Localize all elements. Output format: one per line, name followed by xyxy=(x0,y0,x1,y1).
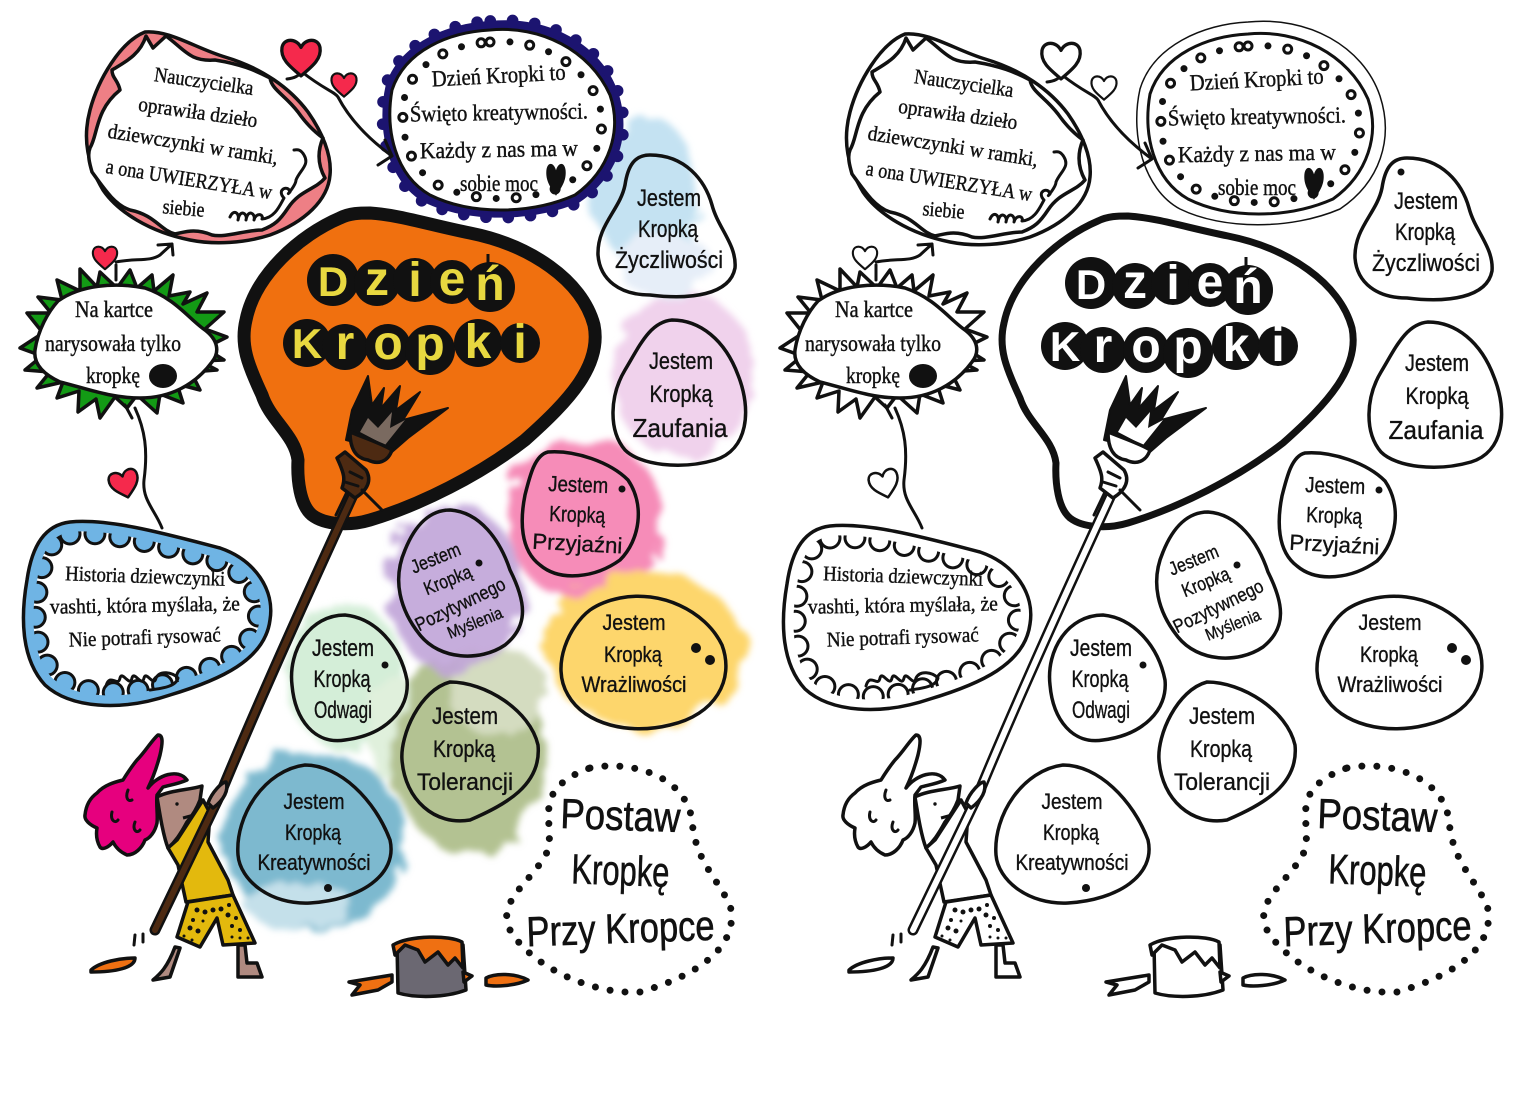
outline dot bubble: Tolerancji xyxy=(1159,682,1295,821)
dot bubble: Wrażliwości: Kropką xyxy=(604,642,663,667)
outline bubble: Historia: vashti, która myślała, że xyxy=(808,591,998,619)
bubble: Dzień Kropki to: Święto kreatywności. xyxy=(410,97,588,127)
dotted bubble: Postaw Kropkę xyxy=(507,766,732,992)
dot bubble: Życzliwości: Kropką xyxy=(638,216,699,243)
outline dotted bubble: Postaw Kropkę: Przy Kropce xyxy=(1283,902,1472,955)
dot bubble: Tolerancji: Tolerancji xyxy=(417,769,513,796)
bubble: Na kartce xyxy=(20,269,227,418)
bubble: Dzień Kropki to: sobie moc xyxy=(460,171,538,196)
outline title blob: z xyxy=(1123,256,1147,309)
bubble: Historia xyxy=(23,521,271,705)
outline dot bubble: Odwagi: Odwagi xyxy=(1072,697,1130,724)
outline bubble: Dzień Kropki to: sobie moc xyxy=(1218,175,1296,200)
outline heart with arrow xyxy=(853,244,933,280)
dot bubble: Pozytywnego Myślenia xyxy=(399,510,522,656)
outline title blob xyxy=(1002,216,1353,527)
dot bubble: Życzliwości xyxy=(598,155,735,297)
outline heart connector xyxy=(867,405,922,528)
outline dot bubble: Kreatywności xyxy=(996,765,1149,903)
heart connector xyxy=(107,405,162,528)
title blob xyxy=(244,213,595,524)
dot bubble: Kreatywności: Jestem xyxy=(284,789,344,814)
dot bubble: Przyjaźni: Jestem xyxy=(548,471,609,498)
bubble: Dzień Kropki to: Każdy z nas ma w xyxy=(420,136,578,163)
outline bubble: Nauczycielka: Nauczycielka xyxy=(913,64,1016,102)
outline dot bubble: Życzliwości: Jestem xyxy=(1394,188,1458,215)
outline bubble: Na kartce: narysowała tylko xyxy=(805,331,941,356)
outline dotted bubble: Postaw Kropkę: Postaw xyxy=(1317,790,1439,841)
title blob: K xyxy=(292,320,322,367)
bubble: Na kartce: Na kartce xyxy=(75,297,153,322)
girl with brush xyxy=(85,376,448,980)
outline dot bubble: Tolerancji: Tolerancji xyxy=(1174,769,1270,796)
dot bubble: Odwagi: Kropką xyxy=(314,666,371,693)
outline title blob: k xyxy=(1223,319,1250,372)
outline hearts with arrow xyxy=(1042,43,1152,168)
outline dot bubble: Życzliwości xyxy=(1355,158,1492,300)
dot bubble: Odwagi: Jestem xyxy=(312,635,374,662)
outline dot bubble: Wrażliwości xyxy=(1317,596,1482,729)
outline dot bubble: Odwagi: Kropką xyxy=(1072,666,1129,693)
outline dot bubble: Wrażliwości: Kropką xyxy=(1360,642,1419,667)
outline title blob: ń xyxy=(1233,261,1263,314)
outline bubble: Nauczycielka: dziewczynki w ramki, xyxy=(866,121,1040,171)
outline girl with brush xyxy=(843,376,1206,980)
outline title blob: i xyxy=(1166,257,1180,310)
outline dot bubble: Pozytywnego Myślenia: Kropką xyxy=(1179,564,1233,602)
outline title blob: K xyxy=(1050,323,1080,370)
dotted bubble: Postaw Kropkę: Kropkę xyxy=(571,845,670,896)
outline dot bubble: Wrażliwości: Wrażliwości xyxy=(1338,672,1442,697)
dot bubble: Pozytywnego Myślenia: Jestem xyxy=(408,539,464,578)
outline dotted bubble: Postaw Kropkę: Kropkę xyxy=(1328,845,1427,896)
outline bubble: Nauczycielka: siebie xyxy=(922,196,966,224)
heart with arrow to teacher bubble xyxy=(93,244,173,280)
dot bubble: Tolerancji: Kropką xyxy=(433,736,496,763)
bubble: Historia: vashti, która myślała, że xyxy=(50,591,240,619)
bubble: Historia: Historia dziewczynki xyxy=(65,561,226,591)
dot bubble: Zaufania: Zaufania xyxy=(632,413,728,443)
dotted bubble: Postaw Kropkę: Postaw xyxy=(560,790,682,841)
dot bubble: Pozytywnego Myślenia: Kropką xyxy=(421,562,475,600)
dot bubble: Przyjaźni xyxy=(522,452,638,576)
dot bubble: Zaufania: Jestem xyxy=(649,348,713,375)
title blob: k xyxy=(465,316,492,369)
outline dot bubble: Zaufania: Zaufania xyxy=(1388,415,1484,445)
dot bubble: Pozytywnego Myślenia: Pozytywnego xyxy=(412,574,509,636)
outline title blob: p xyxy=(1173,321,1203,374)
outline bubble: Nauczycielka: a ona UWIERZYŁA w xyxy=(864,156,1035,206)
outline dot bubble: Pozytywnego Myślenia: Jestem xyxy=(1166,541,1222,580)
outline dot bubble: Przyjaźni: Kropką xyxy=(1306,502,1363,529)
outline dot bubble: Przyjaźni: Przyjaźni xyxy=(1289,530,1380,559)
bubble: Nauczycielka: oprawiła dzieło xyxy=(137,92,259,132)
watercolour washes xyxy=(225,115,755,930)
dot bubble: Zaufania: Kropką xyxy=(650,381,713,408)
outline bubble: Nauczycielka xyxy=(846,34,1090,245)
dot bubble: Życzliwości: Życzliwości xyxy=(615,247,723,274)
dot bubble: Zaufania xyxy=(613,320,746,465)
outline dot bubble: Zaufania: Kropką xyxy=(1406,383,1469,410)
dot bubble: Przyjaźni: Przyjaźni xyxy=(532,529,623,558)
panel: divider clip xyxy=(760,0,1520,1120)
bubble: Dzień Kropki to xyxy=(382,20,623,218)
outline dot bubble: Wrażliwości: Jestem xyxy=(1358,610,1422,635)
outline dot bubble: Kreatywności: Kropką xyxy=(1043,820,1100,845)
outline dot bubble: Życzliwości: Kropką xyxy=(1395,219,1456,246)
dot bubble: Odwagi: Odwagi xyxy=(314,697,372,724)
bubble: Nauczycielka: siebie xyxy=(162,194,206,222)
outline paint bucket xyxy=(1106,937,1285,996)
outline bubble: Historia: Historia dziewczynki xyxy=(823,561,984,591)
outline bubble: Dzień Kropki to: Święto kreatywności. xyxy=(1168,101,1346,131)
hearts with arrow xyxy=(282,40,392,165)
title blob: p xyxy=(415,318,445,371)
outline dot bubble: Pozytywnego Myślenia: Pozytywnego xyxy=(1170,576,1267,638)
title blob: i xyxy=(513,316,527,369)
dot bubble: Tolerancji xyxy=(402,682,538,821)
dot bubble: Pozytywnego Myślenia: Myślenia xyxy=(444,603,506,643)
title blob: ń xyxy=(475,258,505,311)
outline dot bubble: Życzliwości: Życzliwości xyxy=(1372,250,1480,277)
outline title blob: r xyxy=(1094,320,1112,373)
dot bubble: Kreatywności: Kreatywności xyxy=(258,850,370,875)
bubble: Historia: Nie potrafi rysować xyxy=(68,622,221,652)
outline dot bubble: Pozytywnego Myślenia xyxy=(1157,512,1280,658)
bubble: Nauczycielka xyxy=(86,32,330,243)
outline title blob: e xyxy=(1197,256,1223,309)
dot bubble: Kreatywności: Kropką xyxy=(285,820,342,845)
dotted bubble: Postaw Kropkę: Przy Kropce xyxy=(526,902,715,955)
dot bubble: Odwagi xyxy=(292,615,407,741)
outline bubble: Na kartce xyxy=(780,269,987,418)
paint bucket xyxy=(349,937,528,996)
dot bubble: Wrażliwości: Jestem xyxy=(602,610,666,635)
dot bubble: Tolerancji: Jestem xyxy=(432,703,498,730)
outline dot bubble: Tolerancji: Jestem xyxy=(1189,703,1255,730)
outline dot bubble: Przyjaźni: Jestem xyxy=(1305,472,1366,499)
bubble: Nauczycielka: Nauczycielka xyxy=(153,62,256,100)
outline dot bubble: Odwagi: Jestem xyxy=(1070,635,1132,662)
outline title blob: D xyxy=(1076,261,1106,308)
dot bubble: Przyjaźni: Kropką xyxy=(549,501,606,528)
bubble: Nauczycielka: a ona UWIERZYŁA w xyxy=(104,154,275,204)
outline bubble: Dzień Kropki to xyxy=(1137,21,1385,225)
bubble: Na kartce: narysowała tylko xyxy=(45,331,181,356)
dot bubble: Wrażliwości: Wrażliwości xyxy=(582,672,686,697)
bubble: Nauczycielka: dziewczynki w ramki, xyxy=(106,119,280,169)
outline title blob: o xyxy=(1131,320,1161,373)
bubble: Dzień Kropki to: Dzień Kropki to xyxy=(431,60,566,91)
bubble: Na kartce: kropkę xyxy=(86,363,140,388)
outline bubble: Na kartce: kropkę xyxy=(846,363,900,388)
outline dot bubble: Zaufania xyxy=(1369,322,1502,467)
dot bubble: Wrażliwości xyxy=(561,596,726,729)
outline bubble: Dzień Kropki to: Dzień Kropki to xyxy=(1189,64,1324,95)
panel: colour version xyxy=(20,20,755,996)
outline dot bubble: Przyjaźni xyxy=(1279,453,1395,577)
panel: colouring-page version xyxy=(780,21,1502,996)
dot bubble: Kreatywności xyxy=(238,765,391,903)
title blob: e xyxy=(439,253,465,306)
outline bubble: Nauczycielka: oprawiła dzieło xyxy=(897,94,1019,134)
outline bubble: Historia: Nie potrafi rysować xyxy=(826,622,979,652)
outline title blob: i xyxy=(1271,319,1285,372)
title blob: r xyxy=(336,317,354,370)
title blob: o xyxy=(373,317,403,370)
title blob: i xyxy=(408,254,422,307)
title blob: D xyxy=(318,258,348,305)
outline dot bubble: Odwagi xyxy=(1050,615,1165,741)
outline dot bubble: Tolerancji: Kropką xyxy=(1190,736,1253,763)
outline dot bubble: Pozytywnego Myślenia: Myślenia xyxy=(1202,605,1264,645)
outline bubble: Na kartce: Na kartce xyxy=(835,297,913,322)
title blob: z xyxy=(365,253,389,306)
outline dot bubble: Kreatywności: Jestem xyxy=(1042,789,1102,814)
outline dot bubble: Zaufania: Jestem xyxy=(1405,350,1469,377)
outline bubble: Historia xyxy=(783,525,1031,709)
outline bubble: Dzień Kropki to: Każdy z nas ma w xyxy=(1178,140,1336,167)
outline dotted bubble: Postaw Kropkę xyxy=(1264,766,1489,992)
outline dot bubble: Kreatywności: Kreatywności xyxy=(1016,850,1128,875)
dot bubble: Życzliwości: Jestem xyxy=(637,185,701,212)
